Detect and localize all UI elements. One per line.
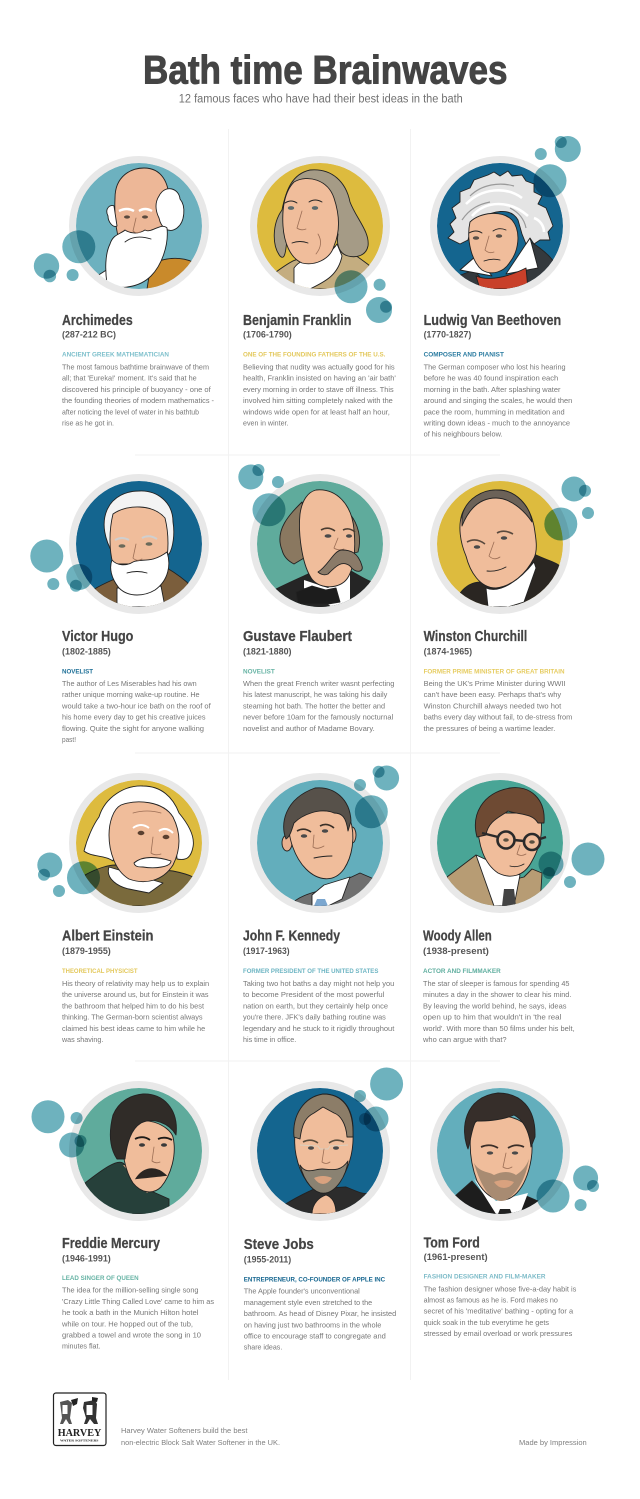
description: the bathroom that helped him to do his best bbox=[62, 1001, 204, 1010]
panel: Steve Jobs bbox=[244, 1068, 403, 1352]
title: Bath time Brainwaves bbox=[143, 48, 508, 92]
name: Benjamin Franklin bbox=[243, 312, 351, 329]
name: John F. Kennedy bbox=[243, 928, 341, 945]
description: The star of sleeper is famous for spending 45 bbox=[423, 979, 570, 988]
footer text bbox=[121, 1426, 280, 1447]
description: past! bbox=[62, 735, 76, 744]
description: world'. With more than 50 films under his belt, bbox=[422, 1024, 575, 1033]
description: The idea for the million-selling single song bbox=[62, 1286, 198, 1295]
bubbles bbox=[37, 852, 100, 897]
description: minutes a day in the shower to clear his mind. bbox=[423, 990, 571, 999]
bubbles bbox=[354, 1068, 403, 1132]
panel: Freddie Mercury bbox=[32, 1081, 214, 1351]
description: secret of his 'meditative' bathing - opting for a bbox=[424, 1307, 574, 1316]
description: his latest manuscript, he was taking his daily bbox=[243, 690, 388, 699]
portrait: Winston Churchill bbox=[430, 474, 570, 614]
description: rather unique morning wake-up routine. He bbox=[62, 690, 200, 699]
portrait: Freddie Mercury bbox=[69, 1081, 209, 1221]
logo figures bbox=[60, 1397, 98, 1424]
description bbox=[242, 362, 396, 428]
description: baths every day without fail, to de-stress from bbox=[424, 713, 572, 722]
description: minutes flat. bbox=[62, 1342, 100, 1351]
portrait: Albert Einstein bbox=[69, 773, 209, 913]
panel: Woody Allen bbox=[422, 773, 604, 1044]
description: before he was 40 found inspiration each bbox=[424, 374, 558, 383]
dates: (1802-1885) bbox=[62, 646, 111, 657]
logo tagline: WATER SOFTENERS bbox=[60, 1438, 99, 1442]
description: management style even stretched to the bbox=[244, 1298, 372, 1307]
description: quick soak in the tub everytime he gets bbox=[424, 1318, 549, 1327]
description: he took a bath in the Munich Hilton hotel bbox=[62, 1308, 199, 1317]
description: pace the room, humming in meditation and bbox=[424, 407, 565, 416]
description: on having just two bathrooms in the whole bbox=[244, 1320, 381, 1329]
panel: Gustave Flaubert bbox=[238, 464, 394, 733]
role: ENTREPRENEUR, CO-FOUNDER OF APPLE INC bbox=[244, 1276, 386, 1283]
role: COMPOSER AND PIANIST bbox=[424, 352, 504, 359]
bubbles bbox=[544, 476, 594, 540]
role: FASHION DESIGNER AND FILM-MAKER bbox=[424, 1274, 546, 1281]
role: ANCIENT GREEK MATHEMATICIAN bbox=[62, 352, 169, 359]
role: FORMER PRESIDENT OF THE UNITED STATES bbox=[243, 968, 378, 975]
description: the pressures of being a wartime leader. bbox=[424, 724, 555, 733]
description: writing down ideas - much to the annoyance bbox=[423, 418, 570, 428]
description: His theory of relativity may help us to explain bbox=[62, 979, 209, 988]
dates: (1821-1880) bbox=[243, 646, 292, 657]
description: almost as famous as he is. Ford makes no bbox=[424, 1296, 558, 1304]
description: stressed by email overload or work pressures bbox=[424, 1329, 573, 1338]
dates: (1946-1991) bbox=[62, 1254, 111, 1265]
description: The fashion designer whose five-a-day habit is bbox=[424, 1284, 577, 1293]
description: his home every day to get his creative juices bbox=[62, 713, 206, 722]
description bbox=[61, 979, 209, 1044]
description: all; that 'Eureka!' moment. It's said that he bbox=[62, 374, 197, 383]
description bbox=[244, 1287, 396, 1352]
description: The Apple founder's unconventional bbox=[244, 1287, 360, 1296]
description bbox=[243, 979, 394, 1044]
bubbles bbox=[534, 136, 581, 197]
dates: (1874-1965) bbox=[424, 646, 472, 657]
bubbles bbox=[538, 842, 604, 888]
portrait: Gustave Flaubert bbox=[250, 474, 390, 614]
role: LEAD SINGER OF QUEEN bbox=[62, 1275, 139, 1282]
description: 'Crazy Little Thing Called Love' came to him as bbox=[62, 1297, 214, 1306]
dates: (287-212 BC) bbox=[62, 330, 116, 341]
portrait: Benjamin Franklin bbox=[250, 156, 390, 296]
description: bathroom. As head of Disney Pixar, he insisted bbox=[244, 1309, 396, 1318]
logo: Harvey Water Softeners bbox=[54, 1393, 106, 1446]
description: would take a two-hour ice bath on the roof of bbox=[61, 701, 212, 710]
dates: (1706-1790) bbox=[243, 330, 292, 341]
role: ACTOR AND FILMMAKER bbox=[423, 968, 501, 975]
panel: Tom Ford bbox=[424, 1081, 599, 1338]
description: even in winter. bbox=[243, 418, 288, 428]
footer text: Harvey Water Softeners build the best bbox=[121, 1426, 248, 1435]
description: windows wide open for at least half an hour, bbox=[242, 407, 390, 416]
description bbox=[424, 1284, 577, 1338]
bubbles bbox=[34, 230, 95, 282]
panel: Benjamin Franklin bbox=[242, 156, 396, 428]
description: By leaving the world behind, he says, ideas bbox=[423, 1001, 567, 1010]
description: never before 10am for the famously nocturnal bbox=[243, 713, 394, 722]
description: you're there. JFK's daily bathing routine was bbox=[243, 1013, 386, 1022]
description: flowing. Quite the sight for anyone walking bbox=[62, 724, 204, 733]
portrait: Steve Jobs bbox=[250, 1081, 390, 1221]
description: every morning in order to stave off illness. This bbox=[243, 385, 394, 394]
description: the universe around us, but for Einstein it was bbox=[62, 990, 209, 999]
description: When the great French writer wasnt perfecting bbox=[243, 679, 394, 688]
description: share ideas. bbox=[244, 1343, 282, 1352]
panel: John F. Kennedy bbox=[243, 766, 399, 1044]
description: Winston Churchill always needed two hot bbox=[424, 701, 561, 710]
footer text: non-electric Block Salt Water Softener in the UK. bbox=[121, 1438, 280, 1447]
name: Ludwig Van Beethoven bbox=[424, 312, 561, 329]
description: while on tour. He hopped out of the tub, bbox=[61, 1319, 193, 1328]
description: was shaving. bbox=[61, 1035, 103, 1044]
dates: (1961-present) bbox=[424, 1252, 488, 1263]
description bbox=[243, 679, 394, 733]
description: who can argue with that? bbox=[422, 1035, 507, 1044]
name: Archimedes bbox=[62, 312, 133, 329]
name: Woody Allen bbox=[423, 928, 492, 945]
name: Steve Jobs bbox=[244, 1236, 314, 1253]
description: to become President of the most powerful bbox=[243, 990, 385, 999]
description: novelist and author of Madame Bovary. bbox=[243, 724, 375, 733]
dates: (1955-2011) bbox=[244, 1255, 291, 1266]
description: legendary and he stuck to it rigidly throughout bbox=[243, 1024, 394, 1033]
description: health, Franklin insisted on having an 'air bath' bbox=[243, 374, 396, 383]
description bbox=[61, 679, 212, 744]
panel: Victor Hugo bbox=[30, 474, 212, 744]
description: The author of Les Miserables had his own bbox=[62, 679, 197, 688]
description bbox=[423, 362, 572, 439]
panel: Archimedes bbox=[34, 156, 215, 428]
dates: (1938-present) bbox=[423, 946, 489, 957]
description: discovered his principle of buoyancy - one of bbox=[62, 385, 212, 394]
description: grabbed a towel and wrote the song in 10 bbox=[62, 1330, 201, 1340]
description: involved him sitting completely naked with the bbox=[243, 396, 393, 405]
portrait: Victor Hugo bbox=[69, 474, 209, 614]
role: THEORETICAL PHYSICIST bbox=[62, 968, 138, 975]
name: Gustave Flaubert bbox=[243, 628, 352, 645]
description: Taking two hot baths a day might not help you bbox=[243, 979, 394, 988]
description bbox=[61, 1286, 214, 1351]
description: claimed his best ideas came to him while he bbox=[62, 1024, 205, 1033]
portrait: Tom Ford bbox=[430, 1081, 570, 1221]
description: nation on earth, but they certainly help once bbox=[243, 1001, 388, 1010]
panel: Ludwig Van Beethoven bbox=[423, 136, 581, 439]
description bbox=[422, 979, 575, 1044]
name: Winston Churchill bbox=[424, 628, 527, 645]
description: office to encourage staff to congregate and bbox=[244, 1332, 386, 1340]
role: NOVELIST bbox=[243, 668, 275, 675]
portrait: Archimedes bbox=[69, 156, 209, 296]
description: can't have been easy. Perhaps that's why bbox=[424, 690, 562, 699]
dates: (1917-1963) bbox=[243, 946, 290, 957]
portrait: John F. Kennedy bbox=[250, 773, 390, 913]
description: after noticing the level of water in his bathtub bbox=[62, 407, 199, 416]
dates: (1770-1827) bbox=[424, 330, 471, 341]
role: NOVELIST bbox=[62, 668, 93, 675]
name: Freddie Mercury bbox=[62, 1235, 161, 1252]
role: ONE OF THE FOUNDING FATHERS OF THE U.S. bbox=[243, 352, 386, 359]
description: rise as he got in. bbox=[62, 418, 114, 428]
description: open up to him that wouldn't in 'the real bbox=[423, 1013, 562, 1022]
name: Tom Ford bbox=[424, 1234, 480, 1251]
panel: Winston Churchill bbox=[424, 474, 594, 733]
description: The German composer who lost his hearing bbox=[424, 362, 566, 372]
bubbles bbox=[334, 270, 392, 323]
description: around and singing the scales, he would then bbox=[424, 396, 572, 405]
description bbox=[62, 362, 215, 428]
role: FORMER PRIME MINISTER OF GREAT BRITAIN bbox=[424, 668, 565, 675]
description: thinking. The German-born scientist always bbox=[62, 1013, 203, 1022]
bubbles bbox=[536, 1166, 599, 1212]
dates: (1879-1955) bbox=[62, 946, 111, 957]
bubbles bbox=[30, 540, 92, 592]
logo wordmark: HARVEY bbox=[58, 1428, 102, 1439]
description: the founding theories of modern mathematics - bbox=[62, 396, 215, 405]
description: of his neighbours below. bbox=[424, 430, 503, 439]
portrait: Ludwig Van Beethoven bbox=[430, 156, 570, 296]
description bbox=[424, 679, 572, 733]
panel: Albert Einstein bbox=[37, 773, 209, 1044]
description: The most famous bathtime brainwave of them bbox=[62, 362, 209, 372]
description: steaming hot bath. The hotter the better and bbox=[243, 701, 385, 710]
name: Victor Hugo bbox=[62, 628, 133, 645]
description: Believing that nudity was actually good for his bbox=[243, 362, 395, 372]
description: morning in the bath. After splashing water bbox=[424, 385, 561, 394]
name: Albert Einstein bbox=[62, 928, 153, 945]
portrait: Woody Allen bbox=[430, 773, 570, 913]
subtitle: 12 famous faces who have had their best ideas in the bath bbox=[179, 94, 463, 106]
bubbles bbox=[354, 766, 399, 828]
description: Being the UK's Prime Minister during WWII bbox=[424, 679, 566, 688]
bubbles bbox=[32, 1100, 86, 1158]
description: his time in office. bbox=[243, 1035, 296, 1044]
bubbles bbox=[238, 464, 286, 526]
credit: Made by Impression bbox=[519, 1438, 587, 1447]
